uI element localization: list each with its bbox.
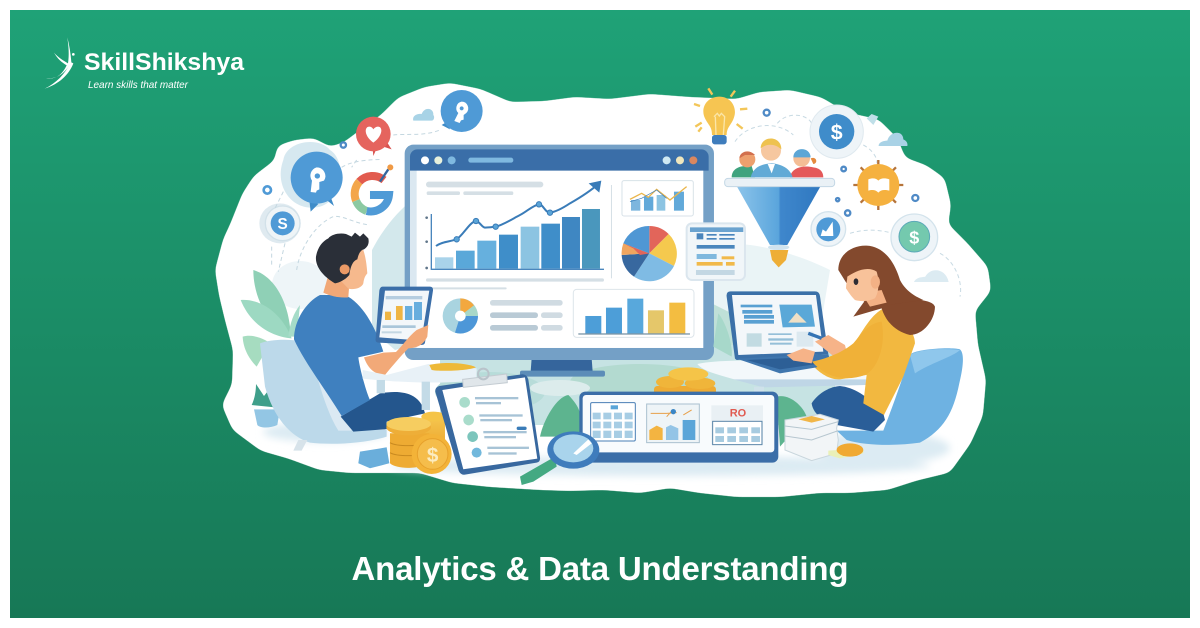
white illustration blob (218, 86, 988, 494)
wide tablet (579, 392, 778, 463)
icon: leaping figure (45, 37, 75, 89)
arm and hand (787, 322, 883, 378)
desk (697, 361, 867, 384)
coin on floor (828, 443, 863, 458)
icon: soft cloud behind bubble (281, 142, 340, 208)
icon: orange book badge (853, 160, 903, 210)
icon: cloud lower (914, 270, 949, 282)
trend line with arrow (436, 181, 601, 246)
icon: cloud small (867, 114, 878, 125)
woman with laptop and foreground (520, 280, 963, 485)
hair (838, 246, 923, 307)
summary lines (490, 300, 563, 331)
pie chart (622, 226, 677, 281)
top-left social icons (259, 90, 483, 272)
coin stack (386, 412, 452, 474)
face (846, 269, 878, 301)
small device on floor (358, 447, 389, 468)
browser header (410, 149, 709, 171)
floor shadows (263, 422, 950, 476)
lower bar chart (573, 289, 694, 337)
small combo chart (622, 181, 693, 216)
pants (812, 386, 885, 432)
pants (341, 392, 425, 432)
logo: SkillShikshya (45, 37, 245, 91)
monitor frame (405, 145, 714, 360)
monitor screen (410, 170, 703, 348)
icon: key bubble top (441, 90, 483, 132)
icon: light bulb (694, 88, 747, 144)
icon: heart bubble (356, 117, 392, 156)
magnifier (520, 431, 599, 485)
icon: cloud (879, 133, 907, 146)
icon: blue arrow badge (811, 212, 846, 246)
icon: green dollar coin: $ (909, 227, 919, 247)
calendar (591, 403, 635, 441)
main chart heading lines (426, 182, 604, 289)
sweater (813, 309, 915, 415)
monitor stand (520, 358, 605, 377)
icon: gear (764, 110, 770, 116)
pale scenery behind characters (263, 200, 950, 476)
chair (260, 340, 387, 444)
hair back (853, 280, 935, 335)
plant leaves (241, 270, 300, 367)
icon: green dollar coin (891, 214, 938, 261)
icon: dollar coin badge (259, 203, 301, 243)
donut chart (443, 298, 478, 334)
laptop (727, 291, 830, 373)
divider (610, 185, 613, 278)
blue chair (837, 348, 963, 445)
ROI calendar panel (711, 405, 763, 445)
monitor dashboard (405, 145, 745, 377)
potted plant (252, 384, 280, 427)
woman's head (838, 246, 923, 307)
dashed connectors (735, 108, 961, 297)
icon: dollar coin badge: S (278, 216, 288, 233)
icon: small gear (264, 186, 271, 194)
neck and head (316, 233, 369, 298)
desk (363, 364, 477, 383)
icon: dollar coin: $ (831, 120, 843, 144)
pants repaint at chair edge (353, 422, 387, 430)
ear (871, 275, 880, 289)
tagline: Learn skills that matter (88, 79, 188, 91)
icon: Google G (355, 164, 393, 211)
eye (854, 278, 858, 285)
icon: funnel (725, 178, 835, 267)
icon: dollar coin (810, 105, 863, 158)
man with tablet (241, 233, 540, 475)
icon: cloud (413, 109, 434, 121)
dashed connectors (272, 130, 440, 272)
gold folder (429, 363, 476, 371)
icon: small gears (836, 167, 918, 216)
gold coin stack (654, 367, 716, 396)
main bar chart (425, 209, 604, 269)
green foliage (540, 313, 807, 447)
shirt (294, 295, 383, 416)
ROI calendar panel: RO (730, 408, 747, 420)
icon: small gear top (341, 142, 346, 148)
summary card (687, 223, 745, 280)
chair leg (293, 440, 307, 451)
mini chart (647, 404, 699, 443)
brand name: SkillShikshya (84, 49, 245, 76)
title: Analytics & Data Understanding (352, 550, 848, 587)
clipboard (435, 369, 540, 475)
icon: blue key bubble large (291, 152, 343, 212)
top-right funnel and icons (694, 88, 961, 297)
neck (862, 290, 887, 307)
tablet (376, 287, 433, 345)
paper stack (785, 414, 838, 461)
people above funnel (732, 138, 823, 177)
arm and hand (364, 325, 428, 375)
coin stack: $ (427, 444, 439, 467)
